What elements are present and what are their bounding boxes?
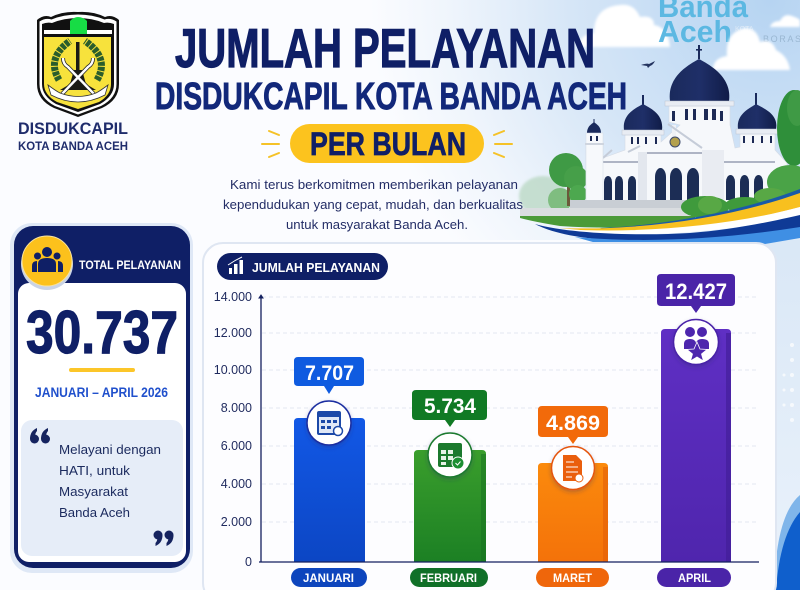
- intro paragraph: untuk masyarakat Banda Aceh.: [286, 218, 468, 232]
- title: DISDUKCAPIL KOTA BANDA ACEH: [155, 76, 627, 118]
- left rays: [262, 131, 279, 157]
- april label: [657, 568, 731, 587]
- crossed swords: [62, 58, 94, 94]
- chart card: [203, 243, 776, 590]
- icon: calendar check: [428, 433, 472, 477]
- opening quote: [30, 428, 50, 444]
- panel: bar chart: [203, 243, 776, 590]
- quote text: Melayani dengan: [59, 442, 161, 457]
- pill: [290, 124, 484, 163]
- small minaret dome: [585, 119, 604, 203]
- intro paragraph: kependudukan yang cepat, mudah, dan berkualitas: [223, 198, 523, 212]
- april label: APRIL: [678, 571, 711, 585]
- bar: januari: [294, 357, 365, 562]
- y-axis labels: 14.000: [214, 290, 252, 304]
- februari label: FEBRUARI: [420, 571, 477, 585]
- chart heading text: JUMLAH PELAYANAN: [252, 261, 380, 275]
- per bulan badge: [262, 124, 512, 163]
- header scene: sky, mosque and swoosh: [370, 0, 800, 590]
- logo caption: [18, 120, 128, 153]
- top white strip: [44, 30, 112, 34]
- yellow rule: [69, 368, 135, 372]
- value label: [294, 357, 364, 394]
- icon: document: [552, 446, 594, 490]
- bar: april: [657, 274, 735, 562]
- period: JANUARI – APRIL 2026: [35, 385, 168, 400]
- arches: [604, 168, 763, 201]
- banda aceh logo text: BORAS: [763, 34, 800, 44]
- quote text: [59, 442, 161, 520]
- maret label: MARET: [553, 571, 593, 585]
- bird: [641, 61, 655, 68]
- bar: maret: [538, 406, 608, 562]
- banda aceh logo text: Aceh: [658, 14, 732, 49]
- value label: 5.734: [424, 395, 476, 418]
- y-axis labels: 12.000: [214, 326, 252, 340]
- pill text: PER BULAN: [310, 126, 466, 162]
- y-axis labels: 10.000: [214, 363, 252, 377]
- y-axis labels: 4.000: [221, 477, 252, 491]
- bushes: [681, 188, 786, 218]
- card heading: TOTAL PELAYANAN: [79, 260, 181, 272]
- mosque: [585, 45, 787, 203]
- value label: 12.427: [665, 279, 727, 304]
- logo caption: DISDUKCAPIL: [18, 120, 128, 138]
- title: [155, 17, 627, 118]
- right trees: [767, 90, 800, 199]
- logo caption: KOTA BANDA ACEH: [18, 139, 128, 153]
- januari label: [291, 568, 367, 587]
- chart icon: [228, 257, 243, 274]
- shield outline: [37, 12, 119, 117]
- cloud: left: [580, 5, 670, 47]
- panel: total pelayanan: [10, 223, 193, 573]
- banda aceh logo text: KOTA: [735, 26, 754, 33]
- y-axis labels: [214, 290, 252, 569]
- x-axis month labels: [291, 568, 731, 587]
- left tree: [519, 153, 588, 216]
- y-axis labels: 2.000: [221, 515, 252, 529]
- icon: calendar: [307, 401, 351, 445]
- y-axis labels: 6.000: [221, 439, 252, 453]
- logo: city emblem: [37, 12, 119, 117]
- card frame: [10, 223, 193, 573]
- wreath: [54, 41, 70, 80]
- side panel background: [700, 225, 800, 590]
- icon: people star: [674, 320, 718, 364]
- main dome: [665, 45, 734, 121]
- right dome: [736, 93, 778, 143]
- title: JUMLAH PELAYANAN: [175, 17, 595, 79]
- left dome: [622, 95, 664, 144]
- bar: februari: [412, 390, 487, 562]
- banda aceh logo text: [658, 0, 800, 49]
- quote box: [21, 420, 183, 556]
- y-axis labels: 8.000: [221, 401, 252, 415]
- clouds: right: [713, 15, 800, 70]
- quote text: Masyarakat: [59, 484, 128, 499]
- emblem: [670, 137, 680, 147]
- value label: 4.869: [546, 412, 600, 435]
- y-axis labels: 0: [245, 555, 252, 569]
- chart heading pill: [217, 253, 388, 280]
- pole and base: [76, 42, 80, 74]
- steps and ground: [520, 200, 700, 228]
- people icon: [21, 236, 73, 290]
- closing quote: [154, 530, 174, 546]
- value label: 7.707: [305, 362, 354, 385]
- quote text: HATI, untuk: [59, 463, 131, 478]
- maret label: [536, 568, 609, 587]
- quote text: Banda Aceh: [59, 505, 130, 520]
- yellow field: [44, 37, 111, 109]
- value label: [538, 406, 608, 444]
- ribbon: [48, 85, 108, 102]
- green tower: [70, 17, 87, 34]
- januari label: JANUARI: [303, 571, 354, 585]
- mosque body: [586, 106, 787, 203]
- intro paragraph: Kami terus berkomitmen memberikan pelayanan: [230, 178, 518, 192]
- axes: [259, 295, 759, 562]
- sky: [370, 0, 800, 240]
- total number: 30.737: [26, 299, 178, 366]
- swoosh: [535, 189, 800, 244]
- februari label: [410, 568, 488, 587]
- value label: [412, 390, 487, 427]
- intro paragraph: [223, 178, 523, 232]
- value label: [657, 274, 735, 313]
- right rays: [494, 131, 512, 157]
- side dots: [782, 343, 794, 422]
